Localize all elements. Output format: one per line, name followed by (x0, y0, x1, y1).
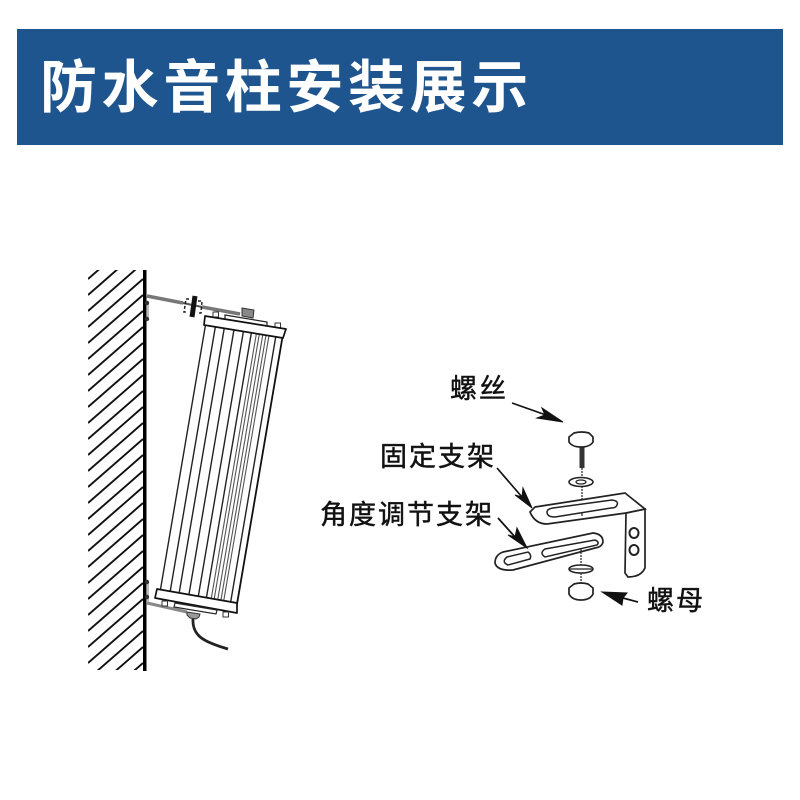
bottom cap (155, 589, 237, 613)
label: fixed bracket: 固定支架 (380, 442, 496, 472)
arrow: angle bracket (498, 518, 527, 548)
label: screw: 螺丝 (450, 374, 508, 404)
installation diagrams (88, 270, 702, 671)
top mount arm (145, 296, 280, 328)
cable (193, 619, 228, 649)
nut (569, 583, 593, 600)
speaker slats (160, 322, 283, 607)
fixed bracket (530, 493, 645, 577)
washer top (569, 478, 593, 486)
label: nut: 螺母 (647, 586, 705, 616)
column speaker (145, 296, 286, 649)
title: 防水音柱安装展示 (40, 56, 533, 120)
title banner (17, 29, 783, 145)
label: angle bracket: 角度调节支架 (320, 500, 494, 530)
wall (88, 270, 146, 671)
bottom mount arm (145, 580, 228, 619)
arrow: fixed bracket (497, 468, 532, 508)
washer bottom (569, 565, 593, 573)
screw (569, 432, 593, 512)
angle bracket (495, 533, 603, 570)
arrow: nut (602, 592, 638, 605)
bracket assembly (495, 432, 645, 600)
arrow: screw (512, 403, 563, 422)
top cap (204, 316, 286, 338)
